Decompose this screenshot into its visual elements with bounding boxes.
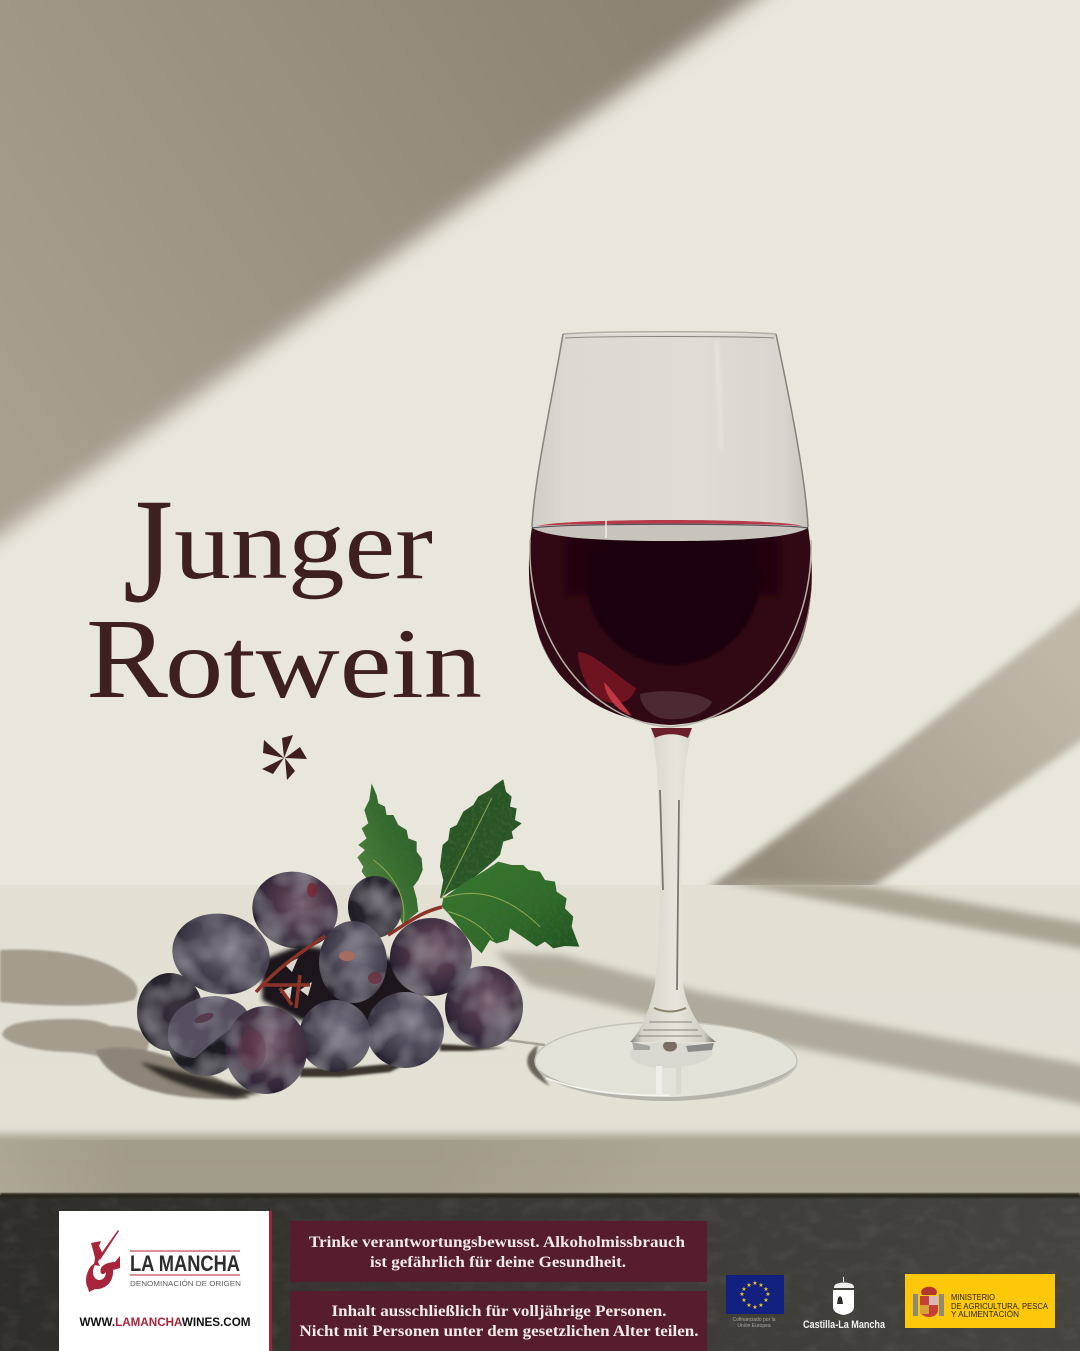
grape: left large <box>165 905 277 1003</box>
panel: Ministerio logo <box>905 1274 1055 1328</box>
icon: La Mancha knight and horse <box>86 1230 120 1292</box>
icon: EU flag: ★ <box>752 1280 758 1287</box>
leaf: upper right <box>440 779 522 898</box>
icon: Castilla-La Mancha crest: Castilla-La Mancha <box>803 1319 886 1331</box>
website: WWW.LAMANCHAWINES.COM <box>80 1317 250 1329</box>
glass base shadow <box>527 1045 550 1086</box>
grapes front row <box>165 905 472 1094</box>
wine surface <box>532 520 808 541</box>
dark stone footer band <box>0 1193 1080 1351</box>
title line 2: R <box>86 595 168 722</box>
grape: back left <box>137 973 203 1051</box>
title <box>86 468 482 722</box>
panel: responsibility message <box>290 1221 707 1282</box>
wall shadow: upper left diagonal <box>0 0 836 578</box>
grape: back centre <box>348 876 402 938</box>
icon: Castilla-La Mancha crest <box>803 1277 886 1331</box>
panel: responsibility message: ist gefährlich für deine Gesundheit. <box>370 1254 626 1271</box>
icon: EU flag: ★ <box>739 1291 745 1298</box>
icon: EU flag: Unión Europea <box>737 1323 771 1329</box>
panel: Ministerio logo: MINISTERIO <box>951 1293 995 1302</box>
panel: age restriction message <box>290 1291 707 1351</box>
panel: age restriction message: Inhalt ausschließlich für volljährige Personen. <box>332 1303 667 1320</box>
leaf: left <box>357 783 423 926</box>
logo wordmark: LA MANCHA <box>130 1251 240 1276</box>
glass stem <box>630 728 716 1042</box>
icon: EU flag: ★ <box>758 1302 764 1309</box>
title line 1: J <box>123 468 173 634</box>
stem to leaves <box>388 907 442 935</box>
leaves <box>357 779 579 953</box>
title line 2: otwein <box>165 608 482 719</box>
wine <box>528 527 812 725</box>
icon: EU flag: ★ <box>763 1286 769 1293</box>
icon: EU flag: ★ <box>746 1302 752 1309</box>
icon: EU flag: ★ <box>765 1291 771 1298</box>
table shadow: glass bands <box>495 880 1080 1108</box>
grapes cast shadow <box>0 950 545 1099</box>
grape: top <box>244 862 346 958</box>
table top <box>0 885 1080 1137</box>
stems <box>256 936 325 1008</box>
title line 2 <box>86 595 482 722</box>
title line 1 <box>123 468 433 634</box>
panel: responsibility message: Trinke verantwortungsbewusst. Alkoholmissbrauch <box>309 1234 685 1251</box>
leaf: right <box>442 862 579 953</box>
glass rim and edges <box>530 332 811 727</box>
grape: right large <box>390 918 472 996</box>
grape: front <box>225 1006 307 1094</box>
icon: EU flag: ★ <box>741 1286 747 1293</box>
icon: EU flag: ★ <box>741 1297 747 1304</box>
glass bowl <box>530 334 810 727</box>
grape bunch <box>137 779 579 1094</box>
wine glass <box>520 332 820 1101</box>
grapes back row <box>137 862 523 1051</box>
logo lines <box>130 1250 240 1276</box>
grape marks <box>193 883 382 1070</box>
grape: far right <box>445 966 523 1048</box>
grape: lower middle <box>299 1000 371 1072</box>
icon: EU flag: Cofinanciado por la <box>732 1317 776 1323</box>
icon: asterisk ornament <box>262 735 307 780</box>
panel: La Mancha logo card <box>59 1211 272 1351</box>
grape: centre <box>319 921 387 1003</box>
panel: Ministerio logo: Y ALIMENTACIÓN <box>951 1310 1019 1319</box>
grape: lower left <box>167 998 243 1076</box>
icon: EU flag: ★ <box>763 1297 769 1304</box>
wall background <box>0 0 1080 890</box>
panel: age restriction message: Nicht mit Personen unter dem gesetzlichen Alter teilen. <box>300 1323 699 1340</box>
panel: Ministerio logo: DE AGRICULTURA, PESCA <box>951 1302 1049 1311</box>
icon: EU flag <box>726 1275 784 1329</box>
table front face <box>0 1134 1080 1204</box>
title line 1: unger <box>174 489 433 600</box>
wall shadow: right diagonal band <box>706 560 1080 890</box>
glass base <box>535 1022 797 1101</box>
logo subtitle: DENOMINACIÓN DE ORIGEN <box>130 1279 241 1288</box>
icon: Spanish coat of arms <box>913 1287 944 1317</box>
grape: lower right <box>366 992 444 1068</box>
icon: EU flag: ★ <box>746 1282 752 1289</box>
gaps of light in the cluster <box>280 958 312 1000</box>
grape: lower left highlight <box>168 996 249 1058</box>
grape cluster dark centre <box>262 945 430 1030</box>
icon: EU flag: ★ <box>752 1304 758 1311</box>
icon: EU flag: ★ <box>758 1282 764 1289</box>
